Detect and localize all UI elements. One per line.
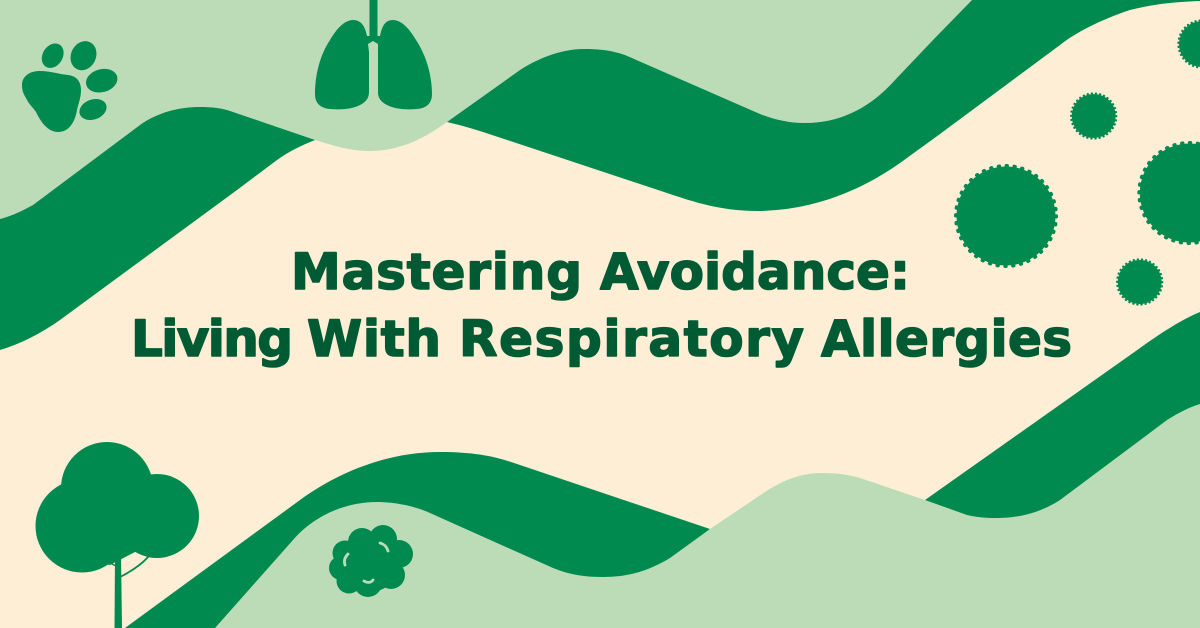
bottom light green wave [215,404,1200,628]
title line 2: Respiratory [459,310,804,368]
icon: small pollen spore top right [1178,20,1200,68]
title [131,243,1072,368]
icon: small pollen spore upper [1071,93,1116,139]
icon: paw print [22,37,120,132]
title line 1: Mastering [291,243,582,301]
title line 2: Living [131,310,293,368]
icon: small pollen spore lower [1117,259,1162,305]
icon: mold cloud [329,525,413,597]
bottom left dark green wave [125,452,710,628]
top right dark green wave [447,0,1200,211]
icon: lungs [315,0,432,109]
icon: large pollen spore centre [956,166,1056,266]
title line 2: With [307,310,441,368]
top left dark green wave [0,107,315,350]
bottom right dark green wave [925,312,1200,540]
icon: large pollen spore right [1139,143,1200,243]
top light green wave [0,0,972,219]
title line 2: Allergies [821,310,1072,368]
title line 1: Avoidance: [600,243,910,301]
icon: tree [36,442,199,628]
